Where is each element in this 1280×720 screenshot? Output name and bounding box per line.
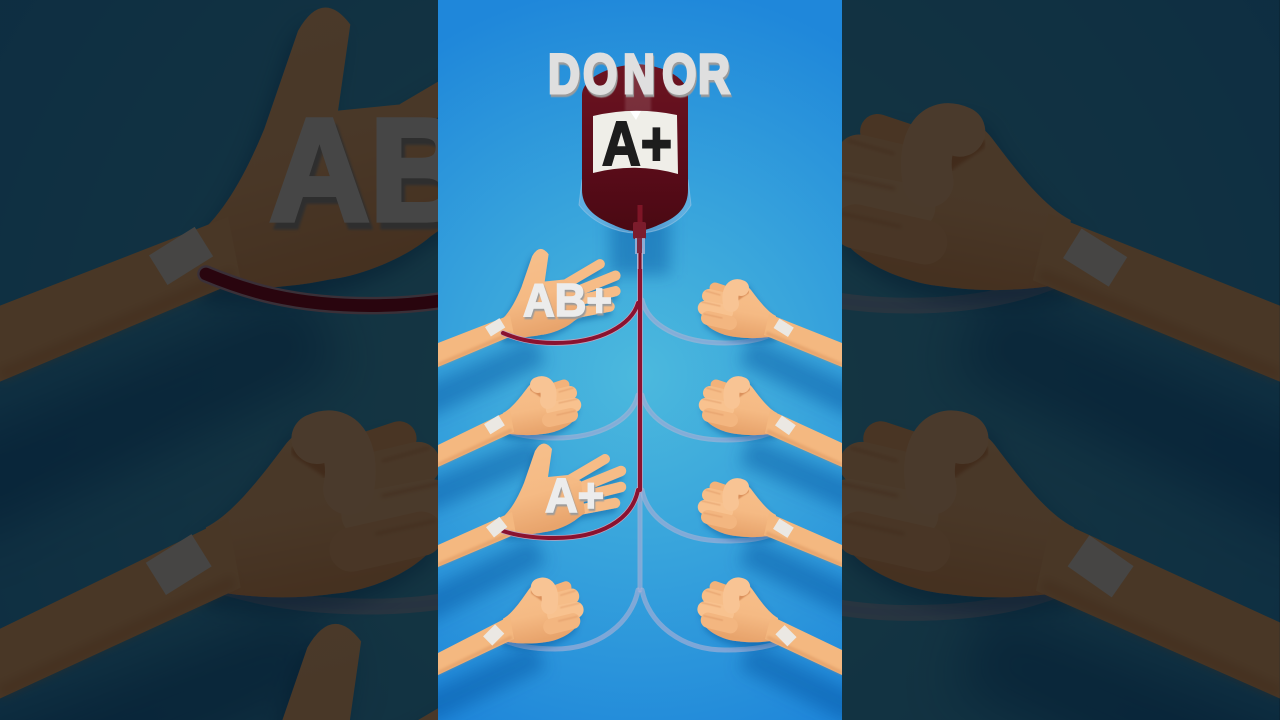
panel: central transfusion scene — [420, 0, 860, 720]
blood bag — [579, 62, 691, 269]
bag label: A+ — [602, 110, 672, 179]
hand: right fist third row — [702, 482, 776, 537]
hand: open palm A+ — [505, 443, 621, 535]
right arms — [764, 314, 842, 675]
red blood tubes — [503, 250, 640, 538]
panel: right blurred background copy — [842, 0, 1280, 720]
hand: right fist second row — [703, 380, 777, 435]
hand: right fist fourth row — [702, 582, 778, 642]
tape strips — [483, 318, 797, 646]
hand: open palm AB+ — [503, 249, 616, 338]
panel: left blurred background copy — [0, 0, 438, 720]
label: A+ on palm: A+ — [545, 470, 604, 523]
left arms — [438, 315, 516, 675]
hand: right fist first row — [702, 283, 776, 338]
faint empty tubes — [503, 300, 780, 650]
label: AB+ on palm: AB+ — [523, 274, 612, 326]
hand: left fist second row — [503, 380, 577, 435]
title: DONOR: DONOR — [548, 43, 730, 105]
hand: left fist fourth row — [503, 582, 579, 644]
connector — [633, 205, 646, 269]
